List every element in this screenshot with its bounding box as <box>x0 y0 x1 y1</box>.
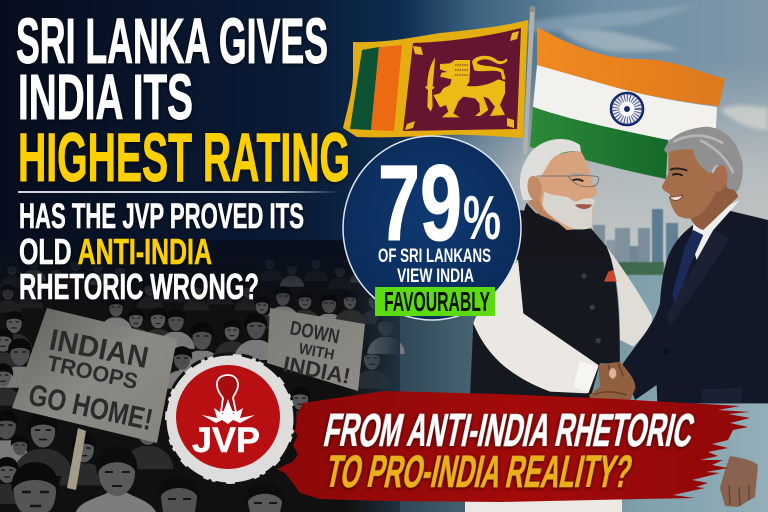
fist icon <box>217 375 238 412</box>
maroon panel <box>403 28 521 131</box>
subtitle line 1: HAS THE JVP PROVED ITS <box>19 197 304 236</box>
handshake <box>589 362 635 402</box>
eye <box>672 174 683 176</box>
subtitle <box>19 197 304 307</box>
burst icon <box>202 399 255 424</box>
black collar <box>517 203 612 260</box>
79 percent figure: 79 <box>378 142 462 263</box>
sign text <box>26 323 156 437</box>
title highlight: HIGHEST RATING <box>18 119 350 196</box>
front protester 2 <box>76 446 156 512</box>
navy suit <box>623 210 768 403</box>
sign text <box>281 317 353 389</box>
green stripe <box>350 47 379 130</box>
right leader body <box>623 200 768 403</box>
lips <box>575 204 592 209</box>
JVP badge <box>165 354 295 484</box>
pocket <box>702 387 742 403</box>
kurta right sleeve <box>607 247 652 347</box>
subtitle line 3: RHETORIC WRONG? <box>19 266 259 307</box>
glasses <box>537 175 599 187</box>
water <box>340 275 768 512</box>
tail <box>472 56 507 79</box>
lapel <box>667 230 730 327</box>
corner leaves <box>405 31 519 130</box>
white stripe <box>533 65 717 140</box>
neck <box>687 180 738 230</box>
title <box>16 5 350 196</box>
hair highlight <box>673 136 733 173</box>
black vest <box>470 210 620 400</box>
left leader body <box>470 210 652 400</box>
neck <box>528 193 567 227</box>
protest crowd <box>0 240 405 512</box>
sign text: WITH <box>297 340 336 364</box>
city skyline <box>593 209 678 275</box>
Sri Lanka flag <box>343 20 528 138</box>
left leader head <box>517 139 612 260</box>
ashoka chakra <box>611 93 643 125</box>
vest buttons <box>569 244 601 343</box>
banner shape <box>277 391 750 502</box>
grunge outer ring <box>165 354 295 484</box>
saffron stripe <box>537 27 725 106</box>
red brush banner <box>277 391 750 502</box>
kurta left sleeve <box>473 262 598 393</box>
percent sign: % <box>463 184 501 253</box>
sword <box>425 57 435 112</box>
JVP wordmark: JVP <box>192 421 260 460</box>
red disc <box>176 365 280 469</box>
eye <box>572 179 583 181</box>
title line 2: INDIA ITS <box>18 61 193 133</box>
pocket square <box>604 270 617 282</box>
sign board <box>12 308 177 443</box>
gold flag border <box>343 20 528 138</box>
beard <box>543 192 595 230</box>
background: dark navy and sky <box>120 0 768 275</box>
white hair <box>520 139 581 200</box>
sign text: DOWN <box>288 317 341 348</box>
subtitle line 2: OLD ANTI-INDIA <box>19 231 212 272</box>
sign text: TROOPS <box>45 350 140 394</box>
flagpole <box>523 6 536 154</box>
India flag <box>530 27 725 179</box>
mane detail <box>455 65 468 75</box>
sign stick <box>67 428 86 490</box>
eyebrow <box>670 169 687 171</box>
grey hair <box>664 127 743 192</box>
title line 1: SRI LANKA GIVES <box>16 5 328 77</box>
sign board <box>267 308 365 391</box>
ear <box>526 175 544 202</box>
divider rule <box>18 191 340 193</box>
kurta hem below banner <box>465 498 622 512</box>
badge circle <box>343 136 521 320</box>
eyebrow <box>568 174 585 176</box>
ear <box>711 164 729 193</box>
lion body <box>433 60 505 117</box>
green stripe <box>530 107 668 179</box>
front protester 3 <box>158 474 199 512</box>
front protester 4 <box>245 482 284 512</box>
sign text: INDIA! <box>281 351 353 389</box>
right leader hand <box>720 456 758 507</box>
face <box>538 151 597 230</box>
sign text: GO HOME! <box>26 379 156 437</box>
mouth <box>669 195 683 200</box>
of Sri Lankans: OF SRI LANKANS <box>378 246 491 267</box>
sleeve cuff <box>573 361 598 393</box>
orange stripe <box>371 45 402 131</box>
favourably tag <box>375 287 495 316</box>
patterned tie <box>673 230 703 308</box>
face <box>662 144 717 219</box>
right protest sign <box>267 308 365 391</box>
sign text: INDIAN <box>47 323 151 375</box>
white collar <box>692 200 740 260</box>
favourably label: FAVOURABLY <box>384 286 490 317</box>
stat badge <box>343 136 521 320</box>
suit button <box>663 349 669 355</box>
lion emblem <box>425 56 507 117</box>
front protester 1 <box>12 462 58 512</box>
left protest sign <box>12 308 177 490</box>
right leader head <box>662 127 743 230</box>
view India: VIEW INDIA <box>397 266 474 287</box>
